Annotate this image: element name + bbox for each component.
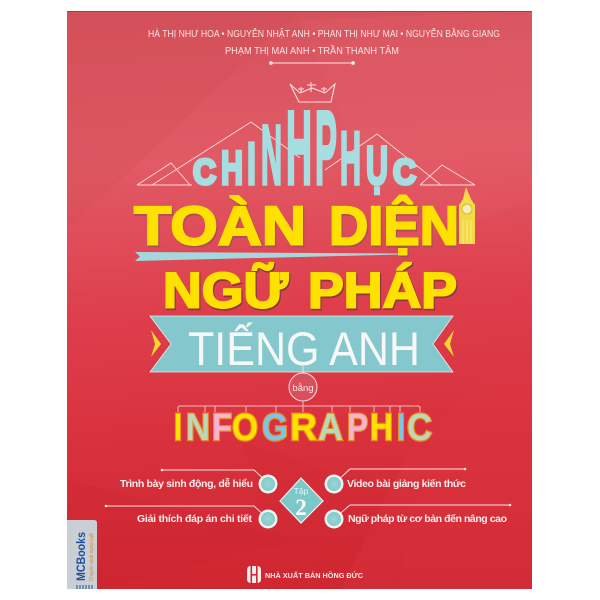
title: INFOGRAPHIC: F [212, 407, 232, 449]
badge: bằng [289, 366, 317, 401]
authors: HÀ THỊ NHƯ HOA • NGUYỄN NHẬT ANH • PHAN THỊ NHƯ MAI • NGUYỄN BẰNG GIANG [148, 27, 500, 40]
authors: PHẠM THỊ MAI ANH • TRẦN THANH TÂM [225, 44, 399, 57]
title: INFOGRAPHIC: N [186, 407, 210, 449]
title: INFOGRAPHIC: O [232, 407, 258, 449]
connector tree [178, 401, 420, 412]
ribbon under title [135, 252, 400, 261]
title: INFOGRAPHIC: H [370, 407, 393, 449]
publisher name: NHÀ XUẤT BẢN HỒNG ĐỨC [265, 570, 364, 580]
title: NGỮ PHÁP: NGỮ [163, 262, 289, 318]
icon: left chevron [151, 330, 161, 357]
author divider [270, 62, 354, 64]
MCBooks tab: MCBooks [74, 532, 88, 581]
banner: TIẾNG ANH: TIẾNG ANH [188, 322, 420, 375]
title: NGỮ PHÁP: NGỮ [164, 263, 290, 320]
title: INFOGRAPHIC [174, 407, 432, 449]
title: CHINH PHỤC: H [286, 90, 312, 207]
feature: Video bài giảng: Video bài giảng kiến thức [347, 478, 466, 490]
title: CHINH PHỤC: C [193, 153, 216, 192]
title: INFOGRAPHIC: A [318, 407, 343, 449]
feature: Video bài giảng [324, 468, 466, 494]
icon: right chevron [444, 330, 454, 357]
badge: bằng: bằng [292, 383, 314, 394]
feature: Ngữ pháp từ cơ bản: Ngữ pháp từ cơ bản đến nâng cao [348, 513, 507, 525]
title: CHINH PHỤC: P [315, 90, 337, 207]
title: INFOGRAPHIC: I [397, 407, 405, 449]
book cover background [67, 11, 532, 589]
mountain outlines [137, 122, 475, 185]
title: TOÀN DIỆN: DIỆN [330, 196, 460, 258]
title: INFOGRAPHIC: G [262, 407, 288, 449]
title: INFOGRAPHIC: R [290, 407, 317, 449]
authors [148, 27, 500, 57]
title: CHINH PHỤC: C [393, 153, 416, 192]
icon: crown [290, 82, 335, 102]
badge: Tập 2 [280, 478, 323, 523]
title: CHINH PHỤC: N [261, 108, 282, 202]
title: TOÀN DIỆN: TOÀN [135, 196, 307, 258]
title: INFOGRAPHIC: C [407, 407, 432, 449]
title: INFOGRAPHIC: P [347, 407, 368, 449]
publisher logo [247, 566, 261, 583]
title: TOÀN DIỆN: DIỆN [329, 194, 459, 256]
feature: Giải thích đáp án: Giải thích đáp án chi tiết [137, 513, 252, 525]
icon: clock tower [459, 187, 475, 244]
MCBooks tab [67, 520, 97, 589]
feature: Trình bày sinh động [120, 469, 278, 494]
title: INFOGRAPHIC: I [174, 407, 182, 449]
MCBooks tab: Chuyên sách ngoại ngữ [89, 532, 95, 581]
title: CHINH PHỤC: Ụ [366, 136, 388, 196]
feature: Trình bày sinh động: Trình bày sinh động, dễ hiểu [120, 477, 253, 490]
title: CHINH PHỤC: H [221, 141, 243, 194]
title: TOÀN DIỆN [134, 194, 460, 258]
badge: Tập 2: Tập [294, 486, 309, 496]
title: CHINH PHỤC: H [340, 116, 361, 200]
title: TOÀN DIỆN: TOÀN [134, 194, 306, 256]
title: CHINH PHỤC: I [247, 131, 256, 197]
title: NGỮ PHÁP: PHÁP [309, 264, 458, 320]
feature: Ngữ pháp từ cơ bản [324, 504, 511, 528]
title: NGỮ PHÁP: PHÁP [308, 262, 457, 318]
title: NGỮ PHÁP [163, 262, 458, 320]
badge: Tập 2: 2 [295, 495, 307, 520]
title: CHINH PHỤC [193, 90, 416, 207]
feature: Giải thích đáp án [105, 505, 278, 528]
